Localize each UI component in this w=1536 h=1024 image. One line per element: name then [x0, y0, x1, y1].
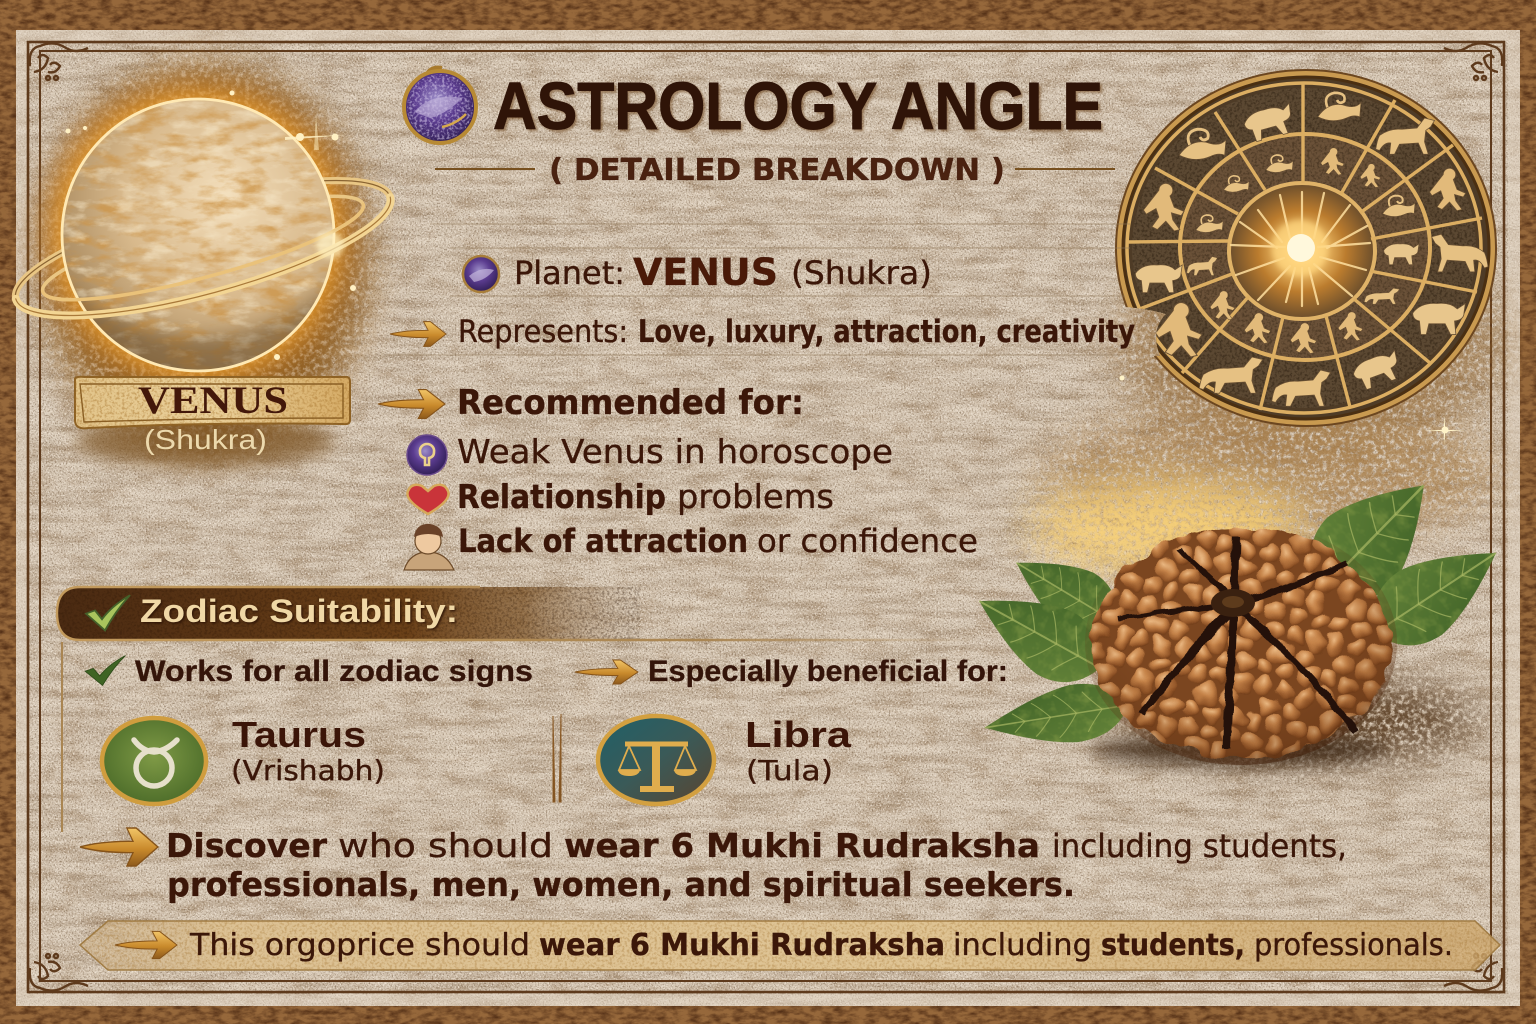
icon: Libra medallion — [598, 716, 714, 804]
badge: Libra — [598, 714, 852, 804]
callout: discover who should wear: professionals, men, women, and spiritual seekers. — [167, 865, 1075, 904]
zodiac wheel — [1040, 70, 1505, 540]
planet illustration: Venus with rings — [4, 63, 402, 466]
row: Planet Venus: VENUS — [633, 251, 778, 294]
footer ribbon: including — [953, 928, 1092, 963]
badge: Taurus — [102, 714, 385, 804]
plaque: VENUS label — [75, 377, 350, 428]
footer ribbon — [80, 921, 1500, 970]
badge: Libra: Libra — [745, 714, 852, 755]
divider lines above planet row — [385, 224, 1130, 355]
footer ribbon: This orgoprice should — [189, 928, 530, 963]
callout: discover who should wear: Discover — [166, 826, 328, 865]
footer ribbon: students, — [1101, 928, 1245, 963]
icon: green check — [85, 656, 125, 685]
row: Represents — [390, 314, 1135, 350]
title: ASTROLOGY ANGLE — [493, 69, 1103, 144]
callout: discover who should wear — [80, 826, 1347, 904]
footer ribbon: professionals. — [1254, 928, 1453, 963]
leaves — [962, 453, 1517, 756]
subtitle: ( DETAILED BREAKDOWN ) — [549, 153, 1005, 188]
list item: relationship problems — [407, 477, 834, 516]
divider between signs — [553, 714, 561, 802]
row: Planet Venus: (Shukra) — [791, 254, 932, 292]
arrow — [115, 931, 177, 959]
badge: Taurus: (Vrishabh) — [231, 754, 385, 787]
arrow — [390, 322, 446, 346]
icon: planet orb — [463, 256, 499, 292]
list item: relationship problems: problems — [677, 477, 834, 516]
row: Planet Venus: Planet: — [514, 254, 625, 292]
callout: discover who should wear: wear 6 Mukhi Rudraksha — [564, 826, 1040, 865]
plaque: VENUS label: VENUS — [138, 379, 288, 422]
icon: heart — [407, 485, 449, 514]
row: works for all zodiac signs: Works for all zodiac signs — [135, 655, 533, 688]
arrow — [378, 390, 445, 418]
row: Represents: Represents: — [458, 314, 628, 350]
icon: person — [404, 524, 454, 570]
row: especially beneficial for: Especially beneficial for: — [648, 655, 1008, 688]
row: Represents: Love, luxury, attraction, creativity — [638, 314, 1135, 350]
list item: lack of attraction: Lack of attraction — [458, 522, 748, 560]
list item: lack of attraction — [404, 522, 978, 570]
list item: lack of attraction: or confidence — [757, 522, 978, 560]
rudraksha illustration — [962, 453, 1517, 766]
arrow — [80, 828, 158, 866]
icon: light check — [86, 595, 130, 630]
plaque subtitle: Shukra: (Shukra) — [144, 424, 267, 455]
row: Planet Venus — [463, 251, 932, 294]
inner ring zodiac figures — [1187, 148, 1419, 354]
banner: Zodiac Suitability: Zodiac Suitability: — [140, 593, 458, 629]
list item: weak Venus: Weak Venus in horoscope — [457, 432, 893, 471]
icon: purple orb — [404, 68, 476, 143]
badge: Taurus: Taurus — [232, 714, 366, 755]
footer ribbon: wear 6 Mukhi Rudraksha — [539, 928, 945, 963]
bead — [1085, 521, 1397, 765]
callout: discover who should wear: who should — [338, 826, 553, 865]
icon: Taurus medallion — [102, 718, 206, 804]
badge: Libra: (Tula) — [746, 754, 833, 787]
outer ring zodiac figures — [1135, 93, 1488, 406]
banner: Zodiac Suitability — [57, 587, 975, 832]
list item: relationship problems: Relationship — [457, 477, 666, 516]
callout: discover who should wear: including students, — [1052, 827, 1347, 865]
icon: purple medallion — [407, 435, 447, 475]
arrow — [575, 660, 638, 684]
row: Recommended for: Recommended for: — [457, 383, 804, 423]
